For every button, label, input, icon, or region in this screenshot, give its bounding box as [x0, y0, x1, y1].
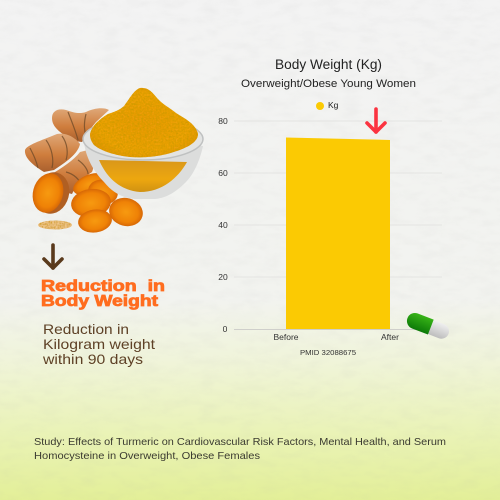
heading: reduction in body weight: Body Weight: [41, 293, 159, 310]
y axis labels: 0: [223, 324, 228, 334]
y axis labels: 20: [218, 272, 228, 282]
chart title: Body Weight (Kg): [275, 57, 382, 72]
text block: description: [42, 321, 155, 367]
text block: study citation: Study: Effects of Turmeric on Cardiovascular Risk Factors, Mental Health, and Serum: [34, 436, 446, 448]
chart subtitle: Overweight/Obese Young Women: [241, 78, 416, 90]
icon: green and white capsule: [405, 311, 451, 341]
heading: reduction in body weight: [41, 278, 165, 310]
y axis labels: 80: [218, 116, 228, 126]
text block: description: Reduction in: [43, 321, 129, 337]
image: turmeric roots and powder bowl: [25, 88, 203, 235]
y axis labels: [218, 116, 228, 334]
legend: [316, 100, 339, 110]
text block: description: Kilogram weight: [43, 336, 155, 352]
source: PMID 32088675: [300, 348, 356, 357]
icon: brown down arrow: [44, 245, 62, 268]
legend: Kg: [328, 100, 339, 110]
powder heap: [90, 88, 198, 157]
y axis labels: 60: [218, 168, 228, 178]
spilled powder: [38, 220, 72, 230]
turmeric slices: [28, 168, 146, 235]
heading: reduction in body weight: Reduction in: [41, 278, 165, 295]
turmeric roots: [25, 108, 109, 194]
glass bowl: [83, 118, 203, 199]
icon: red down arrow: [367, 109, 385, 132]
x axis labels: After: [381, 332, 399, 342]
text block: description: within 90 days: [42, 351, 143, 367]
text block: study citation: Homocysteine in Overweight, Obese Females: [34, 450, 260, 462]
chart: body weight bar chart: [218, 57, 442, 357]
x axis labels: [273, 332, 399, 342]
text block: study citation: [34, 436, 446, 462]
x axis labels: Before: [273, 332, 299, 342]
bars: [286, 138, 390, 329]
y axis labels: 40: [218, 220, 228, 230]
